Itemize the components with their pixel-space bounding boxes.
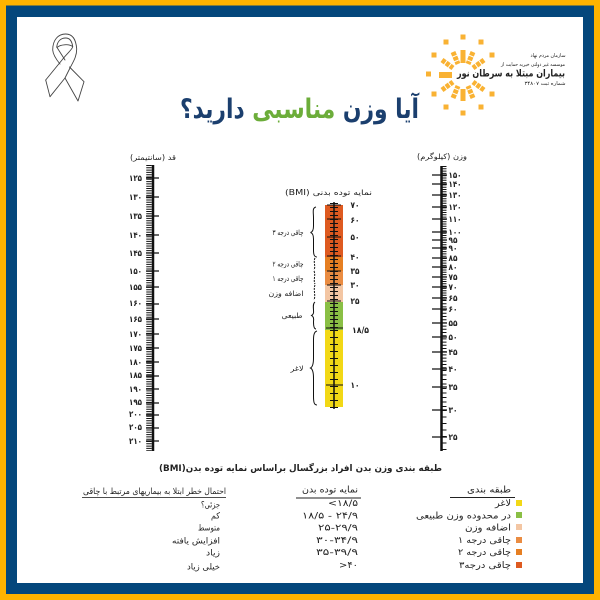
weight ruler numbers: ۱۳۰ bbox=[448, 191, 462, 201]
weight ruler numbers: ۳۰ bbox=[448, 406, 458, 416]
legend underline bbox=[450, 497, 515, 498]
organization line 2: موسسه غیر دولتی خیریه حمایت از bbox=[500, 62, 565, 68]
height ruler numbers: ۱۹۵ bbox=[129, 398, 142, 408]
height ruler numbers: ۲۰۵ bbox=[129, 423, 142, 433]
BMI numbers: ۶۰ bbox=[350, 216, 360, 226]
height ruler numbers: ۱۳۵ bbox=[129, 212, 142, 222]
weight ruler numbers: ۶۵ bbox=[448, 294, 458, 304]
BMI class labels: چاقی درجه ۱ bbox=[272, 274, 304, 283]
height ruler numbers bbox=[129, 174, 142, 447]
legend row: normal: در محدوده وزن طبیعی bbox=[416, 512, 511, 522]
weight ruler numbers: ۱۵۰ bbox=[448, 171, 462, 181]
organization line 1: سازمان مردم نهاد bbox=[530, 53, 566, 59]
height ruler numbers: ۲۰۰ bbox=[129, 410, 142, 420]
ranges rows: ۱۸/۵ - ۲۴/۹ bbox=[302, 512, 358, 522]
legend row: obesity class 3: چاقی درجه۳ bbox=[459, 561, 511, 571]
risk rows: جزئی؟ bbox=[201, 500, 220, 510]
legend row: obesity class 1: چاقی درجه ۱ bbox=[458, 536, 511, 546]
height ruler numbers: ۱۴۰ bbox=[129, 231, 142, 241]
ranges rows: <۱۸/۵ bbox=[328, 499, 358, 509]
weight ruler numbers: ۶۰ bbox=[448, 305, 458, 315]
height ruler numbers: ۱۷۰ bbox=[129, 330, 142, 340]
BMI heading: نمایه توده بدنی (BMI) bbox=[285, 188, 372, 197]
weight ruler numbers bbox=[448, 171, 462, 443]
BMI chart bbox=[268, 188, 372, 409]
height ruler numbers: ۱۸۰ bbox=[129, 358, 142, 368]
BMI numbers: ۵۰ bbox=[350, 233, 360, 243]
weight ruler scale bbox=[432, 166, 447, 451]
weight ruler numbers: ۹۰ bbox=[448, 244, 458, 254]
registration number: شماره ثبت ۳۴۸۰۷ bbox=[524, 81, 566, 87]
weight ruler numbers: ۱۲۰ bbox=[448, 203, 462, 213]
weight ruler numbers: ۱۴۰ bbox=[448, 180, 462, 190]
BMI colour bar bbox=[325, 205, 343, 407]
height ruler numbers: ۱۵۰ bbox=[129, 267, 142, 277]
table heading: طبقه بندی وزن بدن افراد بزرگسال براساس نمایه توده بدن(BMI) bbox=[159, 462, 442, 474]
weight ruler numbers: ۵۰ bbox=[448, 333, 458, 343]
BMI numbers: ۱۰ bbox=[350, 381, 360, 391]
BMI class labels: اضافه وزن bbox=[268, 289, 304, 298]
logo: sunburst bbox=[426, 34, 494, 116]
height ruler numbers: ۱۳۰ bbox=[129, 193, 142, 203]
risk rows: زیاد bbox=[206, 548, 220, 558]
BMI class labels: طبیعی bbox=[282, 311, 303, 320]
height ruler numbers: ۱۹۰ bbox=[129, 385, 142, 395]
risk heading: احتمال خطر ابتلا به بیماریهای مرتبط با چاقی bbox=[83, 487, 226, 497]
BMI numbers: ۳۰ bbox=[350, 281, 360, 291]
BMI numbers: ۲۵ bbox=[350, 297, 360, 307]
weight ruler numbers: ۲۵ bbox=[448, 433, 458, 443]
height ruler numbers: ۲۱۰ bbox=[129, 437, 142, 447]
height ruler numbers: ۱۶۵ bbox=[129, 315, 142, 325]
risk rows bbox=[172, 500, 221, 572]
weight ruler numbers: ۴۵ bbox=[448, 348, 458, 358]
BMI numbers: ۷۰ bbox=[350, 201, 360, 211]
BMI class labels: چاقی درجه ۲ bbox=[272, 260, 304, 268]
BMI class labels: لاغر bbox=[289, 364, 304, 373]
BMI class labels: چاقی درجه ۳ bbox=[272, 228, 304, 237]
ranges heading: نمایه توده بدن bbox=[302, 486, 358, 496]
risk rows: خیلی زیاد bbox=[187, 562, 220, 572]
table column: classification legend bbox=[416, 486, 522, 571]
BMI braces bbox=[310, 207, 317, 405]
table column: BMI ranges bbox=[296, 486, 361, 571]
legend row: obesity class 2: چاقی درجه ۲ bbox=[458, 548, 511, 558]
height ruler bbox=[129, 153, 176, 451]
weight ruler numbers: ۳۵ bbox=[448, 383, 458, 393]
weight ruler numbers: ۷۰ bbox=[448, 283, 458, 293]
weight ruler numbers: ۴۰ bbox=[448, 365, 458, 375]
weight ruler numbers: ۱۱۰ bbox=[448, 215, 462, 225]
weight ruler numbers: ۵۵ bbox=[448, 319, 458, 329]
ranges rows: ۳۰-۳۴/۹ bbox=[316, 536, 358, 546]
table column: risk bbox=[82, 487, 226, 572]
height ruler scale bbox=[146, 165, 159, 451]
weight ruler numbers: ۱۰۰ bbox=[448, 228, 462, 238]
icon: awareness ribbon bbox=[46, 34, 84, 101]
weight ruler bbox=[417, 152, 467, 451]
height ruler numbers: ۱۲۵ bbox=[129, 174, 142, 184]
ranges rows: ۳۵-۳۹/۹ bbox=[316, 548, 358, 558]
risk rows: متوسط bbox=[198, 524, 220, 534]
height ruler numbers: ۱۷۵ bbox=[129, 344, 142, 354]
ranges rows: ۲۵-۲۹/۹ bbox=[318, 524, 358, 534]
logo text bbox=[456, 53, 566, 87]
ranges rows bbox=[302, 499, 358, 571]
height ruler numbers: ۱۵۵ bbox=[129, 283, 142, 293]
BMI numbers bbox=[350, 201, 369, 391]
weight ruler numbers: ۹۵ bbox=[448, 236, 458, 246]
ranges underline bbox=[296, 498, 361, 499]
organization name: بیماران مبتلا به سرطان نور bbox=[456, 68, 565, 80]
weight ruler heading: وزن (کیلوگرم) bbox=[417, 152, 467, 161]
BMI numbers: ۴۰ bbox=[350, 253, 360, 263]
BMI scale bbox=[326, 202, 343, 409]
weight ruler numbers: ۸۰ bbox=[448, 263, 458, 273]
weight ruler numbers: ۸۵ bbox=[448, 254, 458, 264]
risk underline bbox=[82, 496, 226, 499]
legend row: overweight: اضافه وزن bbox=[465, 524, 511, 534]
title: آیا وزن مناسبی دارید؟ bbox=[180, 92, 420, 125]
height ruler numbers: ۱۶۰ bbox=[129, 299, 142, 309]
risk rows: افزایش یافته bbox=[172, 536, 220, 546]
height ruler numbers: ۱۸۵ bbox=[129, 371, 142, 381]
height ruler heading: قد (سانتیمتر) bbox=[130, 153, 176, 162]
legend heading: طبقه بندی bbox=[467, 486, 511, 496]
BMI class labels bbox=[268, 228, 304, 373]
legend row: underweight: لاغر bbox=[494, 499, 511, 509]
weight ruler numbers: ۷۵ bbox=[448, 273, 458, 283]
risk rows: کم bbox=[211, 512, 221, 522]
BMI numbers: ۳۵ bbox=[350, 267, 360, 277]
ranges rows: >۴۰ bbox=[339, 561, 358, 571]
height ruler numbers: ۱۴۵ bbox=[129, 249, 142, 259]
BMI numbers: ۱۸/۵ bbox=[352, 326, 369, 336]
